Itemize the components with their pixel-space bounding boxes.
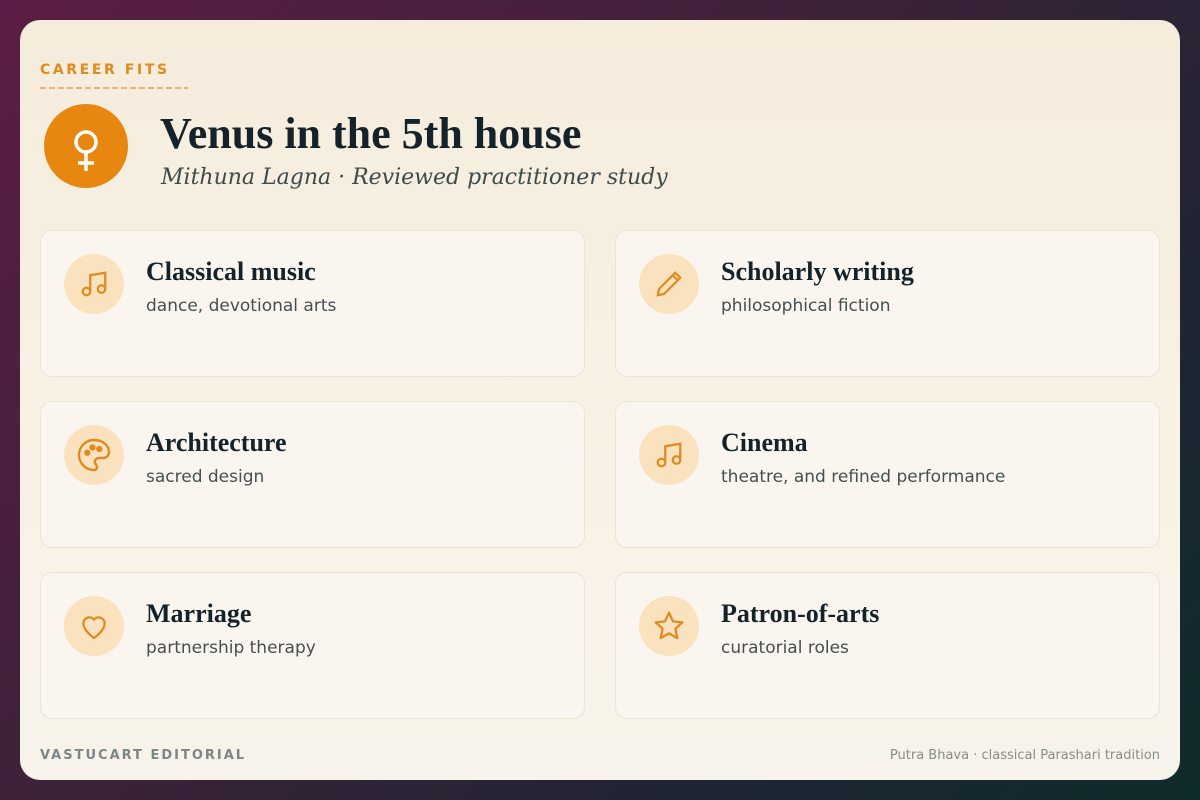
- panel: architecture: Architecture: [146, 428, 287, 457]
- panel: scholarly writing: Scholarly writing: [721, 257, 914, 286]
- panel: scholarly writing: [615, 230, 1160, 377]
- panel: marriage: partnership therapy: [146, 638, 316, 658]
- panel: classical music: dance, devotional arts: [146, 296, 336, 316]
- title: Venus in the 5th house: [160, 109, 581, 158]
- panel: classical music: Classical music: [146, 257, 316, 286]
- footer brand: VASTUCART EDITORIAL: [40, 748, 246, 763]
- dashed rule: [40, 87, 188, 89]
- icon: star: [639, 596, 699, 656]
- panel: patron of arts: curatorial roles: [721, 638, 849, 658]
- panel: patron of arts: Patron-of-arts: [721, 599, 879, 628]
- icon: palette: [64, 425, 124, 485]
- panel: cinema: Cinema: [721, 428, 808, 457]
- panel: classical music: [40, 230, 585, 377]
- panel: marriage: Marriage: [146, 599, 251, 628]
- icon: heart: [64, 596, 124, 656]
- panel: architecture: [40, 401, 585, 548]
- subtitle: Mithuna Lagna · Reviewed practitioner study: [161, 165, 668, 190]
- panel: cinema: [615, 401, 1160, 548]
- panel: cinema: theatre, and refined performance: [721, 467, 1005, 487]
- footer source: Putra Bhava · classical Parashari tradition: [890, 748, 1160, 763]
- icon: pen: [639, 254, 699, 314]
- panel: architecture: sacred design: [146, 467, 264, 487]
- eyebrow label: CAREER FITS: [40, 62, 170, 78]
- icon: music: [64, 254, 124, 314]
- panel: scholarly writing: philosophical fiction: [721, 296, 890, 316]
- panel: patron of arts: [615, 572, 1160, 719]
- icon: venus badge: [44, 104, 128, 188]
- panel: marriage: [40, 572, 585, 719]
- icon: music: [639, 425, 699, 485]
